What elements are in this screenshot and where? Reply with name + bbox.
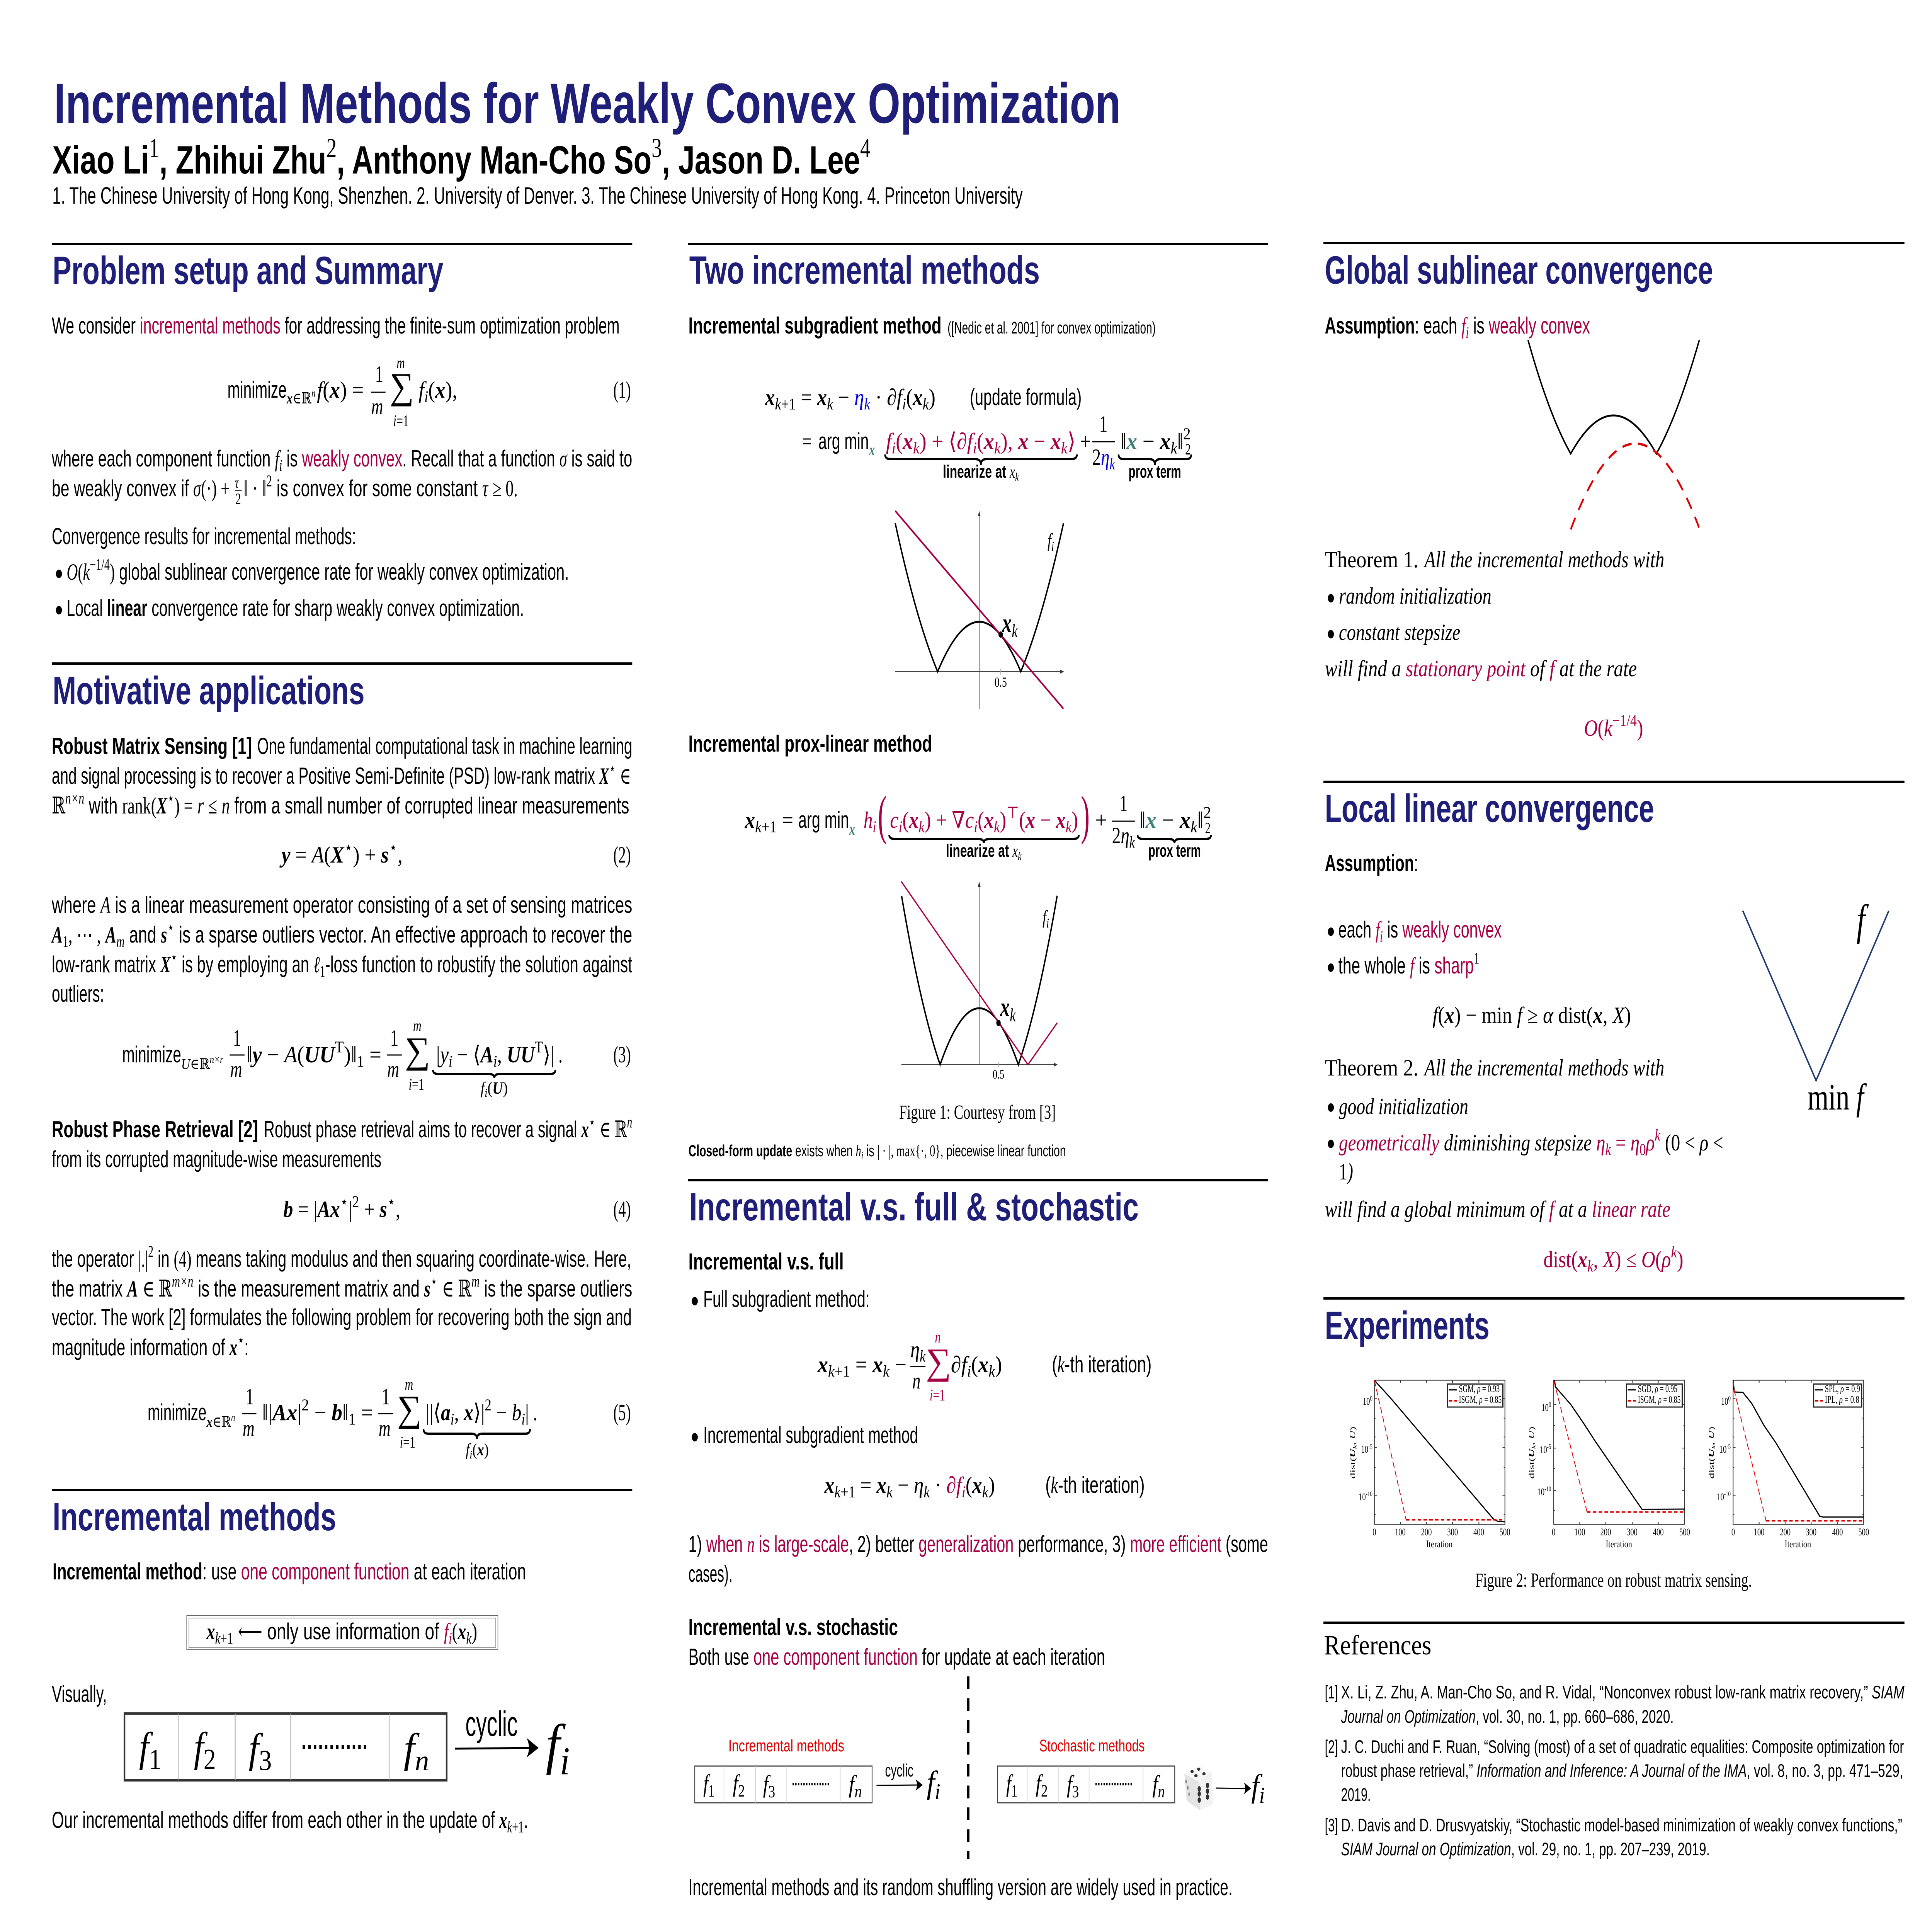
theorem 2: geometrically diminishing stepsize ηk = η0ρk (0 < ρ < [1339, 1126, 1723, 1159]
assumption bullets: the whole f is sharp1 [1338, 949, 1479, 979]
chart: SGD vs ISGM: SGD, ρ = 0.95 [1638, 1383, 1677, 1394]
affiliations: 1. The Chinese University of Hong Kong, Shenzhen. 2. University of Denver. 3. The Chinese University of Hong Kong. 4. Princeton University [52, 183, 1023, 209]
heading: References [1324, 1630, 1431, 1661]
theorem 1: will find a stationary point of f at the rate [1325, 656, 1637, 682]
component function strip: f1 [139, 1724, 162, 1776]
panel: incremental vs full and stochastic [688, 1179, 1268, 1901]
subgradient update formula: xk+1 = xk − ηk · ∂fi(xk) [765, 385, 935, 413]
subgradient update formula: 2 [1185, 441, 1191, 458]
definition: Incremental method: use one component function at each iteration [53, 1559, 526, 1585]
equation 5: i=1 [400, 1433, 415, 1451]
reference 3 [1325, 1815, 1902, 1859]
chart: SPL vs IPL: 0 [1731, 1526, 1735, 1538]
reference 2 [1325, 1736, 1904, 1805]
intro text: We consider incremental methods for addressing the finite-sum optimization problem [52, 313, 619, 339]
equation 1: m [371, 394, 383, 420]
chart: SGD vs ISGM: ISGM, ρ = 0.85 [1638, 1394, 1680, 1405]
chart: SPL vs IPL: 100 [1754, 1526, 1764, 1538]
chart: prox-linear model: 0.5 [993, 1067, 1004, 1082]
equation 2: (2) [613, 842, 631, 868]
prox-linear update formula: prox term [1148, 841, 1201, 861]
theorem 2: All the incremental methods with [1423, 1055, 1664, 1081]
subgradient method title: Incremental subgradient method [689, 313, 942, 339]
prox-linear update formula: hi [864, 808, 876, 836]
diagram: stochastic methods: Stochastic methods [1039, 1736, 1145, 1755]
full subgradient equation: ∑ [926, 1341, 951, 1382]
convergence results [52, 524, 569, 621]
robust phase retrieval text: Robust Phase Retrieval [2] [52, 1117, 258, 1143]
reference 1: [1] [1325, 1682, 1338, 1702]
sensing description: where A is a linear measurement operator consisting of a set of sensing matrices [51, 892, 632, 918]
reference 2: robust phase retrieval,” Information and Inference: A Journal of the IMA, vol. 8, no. 3, pp. 471–529, [1341, 1760, 1903, 1781]
prox-linear method title: Incremental prox-linear method [689, 731, 932, 757]
subgradient update formula: 1 [1099, 412, 1107, 437]
subgradient method title: ([Nedic et al. 2001] for convex optimization) [947, 318, 1156, 337]
robust phase retrieval text: Robust phase retrieval aims to recover a signal x⋆ ∈ ℝn [264, 1113, 632, 1143]
dashed divider [966, 1676, 970, 1859]
subsection: versus full: Incremental v.s. full [689, 1249, 844, 1275]
equation 5: m [405, 1375, 413, 1393]
subgradient method title [689, 313, 1156, 339]
full subgradient bullet: Full subgradient method: [703, 1286, 870, 1312]
reference 3: SIAM Journal on Optimization, vol. 29, no. 1, pp. 207–239, 2019. [1341, 1839, 1710, 1859]
component function strip: f2 [194, 1724, 216, 1776]
title: Incremental Methods for Weakly Convex Optimization [54, 72, 1121, 135]
chart: SGM vs ISGM: ISGM, ρ = 0.85 [1459, 1394, 1502, 1405]
assumption: Assumption: each fi is weakly convex [1325, 313, 1590, 342]
prox-linear update formula: ) [1081, 786, 1090, 845]
closed-form note: Closed-form update exists when hi is | · |, max{·, 0}, piecewise linear function [689, 1142, 1066, 1162]
chart: SPL vs IPL: 200 [1780, 1526, 1791, 1538]
linear rate formula: dist(xk, X) ≤ O(ρk) [1543, 1243, 1683, 1275]
equation 3: m [387, 1057, 399, 1082]
chart: sharp V function [1743, 896, 1889, 1118]
theorem 2: 1) [1339, 1159, 1353, 1185]
phase retrieval description: the matrix A ∈ ℝm×n is the measurement matrix and s⋆ ∈ ℝm is the sparse outliers [52, 1273, 632, 1302]
chart: SGD vs ISGM: 0 [1552, 1526, 1555, 1538]
sensing description: A1, ⋯ , Am and s⋆ is a sparse outliers vector. An effective approach to recover the [51, 919, 632, 951]
heading: Experiments [1325, 1303, 1490, 1348]
theorem 2: good initialization [1339, 1094, 1468, 1120]
chart: prox-linear model: xk [1000, 992, 1016, 1026]
advantages text: cases). [689, 1561, 733, 1587]
diagram: incremental methods: fi [927, 1764, 940, 1805]
authors: Xiao Li1, Zhihui Zhu 2, Anthony Man-Cho So 3, Jason D. Lee 4 [52, 133, 871, 182]
theorem 2 [1325, 1055, 1723, 1222]
equation 1: fi(x), [418, 378, 457, 406]
equation 3: U∈ℝ n×r [181, 1053, 224, 1072]
subsection: versus stochastic [689, 1615, 1105, 1670]
equation 5: . [533, 1400, 537, 1426]
visually label: Visually, [52, 1681, 107, 1707]
full subgradient equation: i=1 [930, 1386, 945, 1404]
equation 1: m [396, 354, 405, 372]
robust matrix sensing text: One fundamental computational task in machine learning [257, 733, 632, 759]
panel: problem setup and summary [51, 243, 632, 621]
chart: SPL vs IPL: SPL, ρ = 0.9 [1825, 1383, 1860, 1394]
subgradient update formula: fi(xk) + ⟨∂ fi(xk), x − xk⟩ [886, 429, 1076, 457]
equation 1 [228, 354, 631, 430]
heading: Global sublinear convergence [1325, 248, 1713, 292]
incremental subgradient equation [824, 1472, 1145, 1501]
panel: local linear convergence [1323, 781, 1905, 1275]
equation 3: |yi − ⟨Ai, UUT⟩| [436, 1038, 554, 1070]
component function strip [124, 1714, 447, 1780]
equation 5: (5) [613, 1400, 631, 1426]
equation 3 [122, 1017, 631, 1100]
full subgradient equation: xk+1 = xk − [817, 1352, 906, 1380]
equation 4: (4) [613, 1197, 631, 1222]
chart: prox-linear model [901, 881, 1058, 1082]
chart: SGM vs ISGM: 100 [1363, 1395, 1372, 1407]
chart: sharp V function: f [1857, 896, 1869, 944]
poster header [52, 72, 1121, 209]
chart: SGD vs ISGM: 300 [1627, 1526, 1638, 1538]
chart: SGD vs ISGM: 400 [1653, 1526, 1664, 1538]
chart: SPL vs IPL: 500 [1858, 1526, 1869, 1538]
theorem 2: will find a global minimum of f at a linear rate [1325, 1197, 1670, 1222]
chart: SPL vs IPL: 100 [1721, 1395, 1731, 1407]
chart: SGM vs ISGM: 0 [1372, 1526, 1376, 1538]
theorem 1 [1325, 547, 1664, 682]
equation 4 [283, 1193, 631, 1222]
equation 3: ‖y − A(UU T)‖1 = [247, 1038, 381, 1070]
arrow: cyclic [455, 1704, 539, 1758]
diagram: incremental methods: f2 [733, 1770, 745, 1800]
diagram: stochastic methods: f2 [1036, 1770, 1048, 1800]
heading: Motivative applications [53, 669, 365, 713]
robust matrix sensing text: ℝn×n with rank(X⋆) = r ≤ n from a small number of corrupted linear measurements [52, 790, 629, 819]
full subgradient equation: n [912, 1368, 920, 1394]
chart: SGM vs ISGM: 10-10 [1359, 1490, 1372, 1503]
full subgradient equation: ηk [910, 1337, 926, 1365]
chart: SPL vs IPL: 10-10 [1717, 1490, 1731, 1503]
chart: SGM vs ISGM [1349, 1380, 1510, 1550]
equation 1: x∈ℝn [286, 388, 316, 407]
prox-linear update formula: ci(xk) + ∇ ci(xk)⊤(x − xk) [890, 804, 1078, 836]
weak convexity definition: 2 [235, 490, 241, 507]
diagram: stochastic methods: f1 [1006, 1770, 1017, 1800]
diagram: incremental methods: f1 [703, 1770, 714, 1800]
chart: SGM vs ISGM: 200 [1421, 1526, 1432, 1538]
chart: SGM vs ISGM: 10-5 [1361, 1443, 1372, 1455]
chart: SGD vs ISGM: 100 [1575, 1526, 1585, 1538]
robust phase retrieval text: from its corrupted magnitude-wise measurements [52, 1147, 381, 1172]
full subgradient equation: (k-th iteration) [1052, 1352, 1151, 1378]
equation 3: 1 [233, 1026, 241, 1051]
diagram: incremental methods: Incremental methods [728, 1736, 844, 1755]
theorem 1: Theorem 1. [1325, 547, 1418, 573]
reference 3: [3] [1325, 1815, 1338, 1835]
equation 5: m [243, 1416, 255, 1441]
heading: Problem setup and Summary [53, 248, 443, 293]
robust matrix sensing text: and signal processing is to recover a Positive Semi-Definite (PSD) low-rank matrix X⋆ ∈ [52, 760, 631, 789]
equation 3: i=1 [409, 1075, 424, 1093]
reference 1 [1325, 1682, 1905, 1727]
diagram: incremental methods: f3 [763, 1771, 775, 1801]
prox-linear update formula: 2 [1205, 819, 1211, 837]
equation 1: i=1 [393, 412, 409, 430]
subgradient update formula: + [1080, 429, 1091, 454]
diagram: stochastic methods [998, 1736, 1265, 1810]
equation 1: 1 [375, 362, 383, 387]
full subgradient equation: ∂fi(xk) [951, 1352, 1002, 1380]
robust matrix sensing text: Robust Matrix Sensing [1] [52, 733, 252, 759]
reference 1: X. Li, Z. Zhu, A. Man-Cho So, and R. Vidal, “Nonconvex robust low-rank matrix recovery,” SIAM [1341, 1682, 1905, 1702]
chart: SGM vs ISGM: 300 [1447, 1526, 1458, 1538]
chart: SPL vs IPL: Iteration [1785, 1538, 1811, 1550]
reference 1: Journal on Optimization, vol. 30, no. 1, pp. 660–686, 2020. [1341, 1706, 1674, 1727]
reference 3: D. Davis and D. Drusvyatskiy, “Stochastic model-based minimization of weakly convex functions,” [1341, 1815, 1902, 1835]
theorem 2: Theorem 2. [1325, 1055, 1418, 1081]
phase retrieval description: magnitude information of x⋆: [52, 1331, 249, 1361]
equation 3: 1 [390, 1026, 398, 1051]
component function strip: f3 [249, 1725, 272, 1777]
panel: experiments [1323, 1297, 1905, 1591]
diagram: incremental methods [695, 1736, 940, 1805]
prox-linear update formula: xk+1 = [745, 808, 793, 836]
subgradient update formula: x [869, 441, 875, 459]
chart: subgradient linearization: fi [1048, 530, 1054, 554]
subgradient update formula: (update formula) [970, 385, 1082, 410]
prox-linear update formula: x [849, 820, 855, 838]
sensing description: outliers: [52, 981, 104, 1007]
weak convexity definition: τ [235, 474, 239, 491]
equation 5 [148, 1375, 631, 1462]
chart: SGM vs ISGM: 100 [1395, 1526, 1406, 1538]
chart: SPL vs IPL: dist(Uk, U) [1708, 1427, 1716, 1479]
closing sentence: Incremental methods and its random shuffling version are widely used in practice. [689, 1875, 1233, 1901]
equation 3: (3) [613, 1042, 631, 1068]
chart: SGM vs ISGM: dist(Uk, U) [1349, 1427, 1358, 1479]
theorem 1: constant stepsize [1339, 620, 1460, 645]
equation 5: 1 [246, 1384, 254, 1410]
equation 5: 1 [382, 1384, 390, 1410]
phase retrieval description: the operator |.|2 in (4) means taking modulus and then squaring coordinate-wise. Here, [52, 1243, 631, 1272]
chart: SPL vs IPL: IPL, ρ = 0.8 [1825, 1394, 1859, 1405]
rate formula: O(k−1/4) [1584, 712, 1643, 741]
equation 2: y = A(X⋆) + s⋆, [279, 839, 403, 868]
reference 2: J. C. Duchi and F. Ruan, “Solving (most) of a set of quadratic equalities: Composite optimization for [1341, 1736, 1904, 1757]
subgradient update formula: prox term [1128, 462, 1181, 482]
chart: SPL vs IPL: 300 [1806, 1526, 1816, 1538]
equation 3: m [230, 1057, 242, 1082]
chart: SGD vs ISGM: Iteration [1606, 1538, 1632, 1550]
diagram: incremental methods: fn [849, 1771, 862, 1801]
panel: two incremental methods [688, 243, 1268, 1162]
subsection: versus stochastic: Incremental v.s. stochastic [689, 1615, 898, 1640]
equation 3: fi(U) [481, 1079, 508, 1100]
chart: SGM vs ISGM: SGM, ρ = 0.93 [1459, 1383, 1500, 1394]
chart: SGM vs ISGM: 400 [1473, 1526, 1484, 1538]
chart: SGD vs ISGM: 500 [1679, 1526, 1690, 1538]
assumption bullets [1328, 917, 1502, 979]
robust matrix sensing text [52, 733, 632, 819]
subgradient update formula: = [802, 429, 811, 454]
arrow: cyclic: cyclic [465, 1704, 518, 1744]
incremental subgradient equation: (k-th iteration) [1045, 1472, 1145, 1498]
chart: SGD vs ISGM: dist(Uk, U) [1528, 1427, 1537, 1479]
chart: SPL vs IPL [1708, 1380, 1869, 1550]
heading: Incremental v.s. full & stochastic [689, 1185, 1139, 1229]
equation 5: minimize [148, 1400, 206, 1426]
chart: SPL vs IPL: 10-5 [1719, 1443, 1731, 1455]
prox-linear update formula: 1 [1119, 791, 1128, 817]
boxed update rule: xk+1 ⟵ only use information of fi(xk) [206, 1619, 477, 1647]
figure 2 caption: Figure 2: Performance on robust matrix sensing. [1475, 1569, 1752, 1591]
sharpness inequality: f(x) − min f ≥ α dist( x, X) [1432, 1003, 1631, 1028]
equation 2 [279, 839, 631, 868]
assumption title: Assumption: [1325, 851, 1418, 876]
chart: SGM vs ISGM: 500 [1500, 1526, 1510, 1538]
subgradient update formula: arg min [818, 429, 869, 454]
weak convexity definition [51, 446, 632, 507]
panel: motivative applications [51, 662, 633, 1462]
equation 1: f(x) = [317, 378, 364, 403]
weak convexity definition: where each component function fi is weakly convex. Recall that a function σ is said to [51, 446, 632, 475]
equation 3: minimize [122, 1042, 181, 1068]
full subgradient equation [817, 1328, 1151, 1404]
component function strip: fn [404, 1725, 429, 1777]
equation 5: ∑ [397, 1389, 422, 1429]
panel: incremental methods [52, 1489, 632, 1836]
prox-linear update formula: arg min [798, 807, 849, 833]
phase retrieval description [52, 1243, 632, 1361]
chart: SGD vs ISGM [1528, 1380, 1690, 1550]
prox-linear update formula: 2ηk [1112, 823, 1135, 851]
equation 3: m [413, 1017, 422, 1035]
prox-linear update formula: ‖x − xk‖2 [1139, 804, 1211, 836]
equation 3: . [558, 1042, 563, 1068]
equation 5: m [379, 1416, 391, 1441]
sensing description [51, 892, 633, 1007]
incremental subgradient bullet: Incremental subgradient method [703, 1423, 918, 1448]
chart: SPL vs IPL: 400 [1832, 1526, 1843, 1538]
heading: Incremental methods [53, 1495, 336, 1539]
chart: subgradient linearization: xk [1002, 608, 1018, 642]
full subgradient equation: n [935, 1328, 940, 1346]
prox-linear update formula: linearize at xk [946, 841, 1022, 863]
reference 2: 2019. [1341, 1784, 1371, 1805]
assumption bullets: each fi is weakly convex [1338, 917, 1502, 946]
figure 1 caption: Figure 1: Courtesy from [3] [899, 1101, 1056, 1123]
closing sentence: Our incremental methods differ from each other in the update of xk+1. [52, 1807, 528, 1836]
equation 5: ||⟨ai, x⟩|2 − bi| [426, 1396, 529, 1428]
panel: global sublinear convergence [1323, 242, 1905, 741]
chart: SGD vs ISGM: 10-10 [1537, 1485, 1551, 1497]
reference 2: [2] [1325, 1736, 1338, 1757]
diagram: stochastic methods: f3 [1067, 1771, 1079, 1801]
advantages text: 1) when n is large-scale, 2) better generalization performance, 3) more efficient (some [689, 1531, 1268, 1557]
equation 3: ∑ [405, 1030, 430, 1071]
chart: prox-linear model: fi [1043, 907, 1049, 931]
diagram: stochastic methods: fi [1251, 1768, 1265, 1808]
equation 1: minimize [228, 377, 287, 403]
chart: weakly convex curve with quadratic minorant [1528, 340, 1699, 529]
prox-linear update formula: + [1095, 808, 1107, 833]
subgradient update formula [765, 385, 1191, 484]
chart: subgradient linearization: 0.5 [995, 674, 1007, 690]
equation 1: (1) [613, 378, 631, 403]
convergence results: O(k−1/4) global sublinear convergence rate for weakly convex optimization. [66, 556, 569, 585]
equation 4: b = |Ax⋆|2 + s⋆, [283, 1193, 400, 1222]
chart: SGD vs ISGM: 100 [1541, 1401, 1551, 1413]
convergence results: Local linear convergence rate for sharp weakly convex optimization. [66, 596, 524, 621]
advantages text [689, 1531, 1268, 1587]
chart: subgradient linearization [895, 511, 1064, 709]
theorem 1: random initialization [1339, 584, 1492, 609]
equation 5: ‖|Ax|2 − b‖1 = [262, 1396, 373, 1428]
subsection: versus stochastic: Both use one component function for update at each iteration [689, 1644, 1105, 1670]
prox-linear update formula [745, 786, 1211, 863]
panel: references [1323, 1622, 1905, 1859]
weak convexity definition: ‖ · ‖2 is convex for some constant τ ≥ 0. [244, 472, 518, 502]
incremental subgradient equation: xk+1 = xk − ηk · ∂fi(xk) [824, 1473, 995, 1501]
selected component label: fi [546, 1714, 570, 1783]
icon: dice [1184, 1766, 1213, 1810]
chart: sharp V function: min f [1808, 1077, 1867, 1118]
prox-linear update formula: ( [878, 786, 887, 845]
equation 5: fi(x) [466, 1441, 489, 1462]
phase retrieval description: vector. The work [2] formulates the following problem for recovering both the sign and [52, 1305, 632, 1331]
subgradient update formula: linearize at xk [943, 462, 1019, 484]
chart: SGD vs ISGM: 200 [1600, 1526, 1611, 1538]
sensing description: low-rank matrix X⋆ is by employing an ℓ1-loss function to robustify the solution against [52, 948, 633, 980]
convergence results: Convergence results for incremental methods: [52, 524, 356, 550]
equation 5: x∈ℝn [206, 1411, 235, 1430]
robust phase retrieval text [52, 1113, 632, 1172]
chart: SGD vs ISGM: 10-5 [1540, 1443, 1551, 1455]
subgradient update formula: ‖x − xk‖2 [1121, 425, 1191, 457]
chart: SGM vs ISGM: Iteration [1426, 1538, 1452, 1550]
weak convexity definition: be weakly convex if σ(·) + [52, 476, 230, 502]
heading: Two incremental methods [689, 248, 1040, 292]
theorem 1: All the incremental methods with [1423, 547, 1664, 573]
heading: Local linear convergence [1325, 786, 1654, 830]
subgradient update formula: 2ηk [1092, 445, 1115, 473]
diagram: stochastic methods: fn [1152, 1771, 1165, 1801]
equation 1: ∑ [389, 366, 414, 407]
diagram: incremental methods: cyclic [885, 1761, 913, 1780]
